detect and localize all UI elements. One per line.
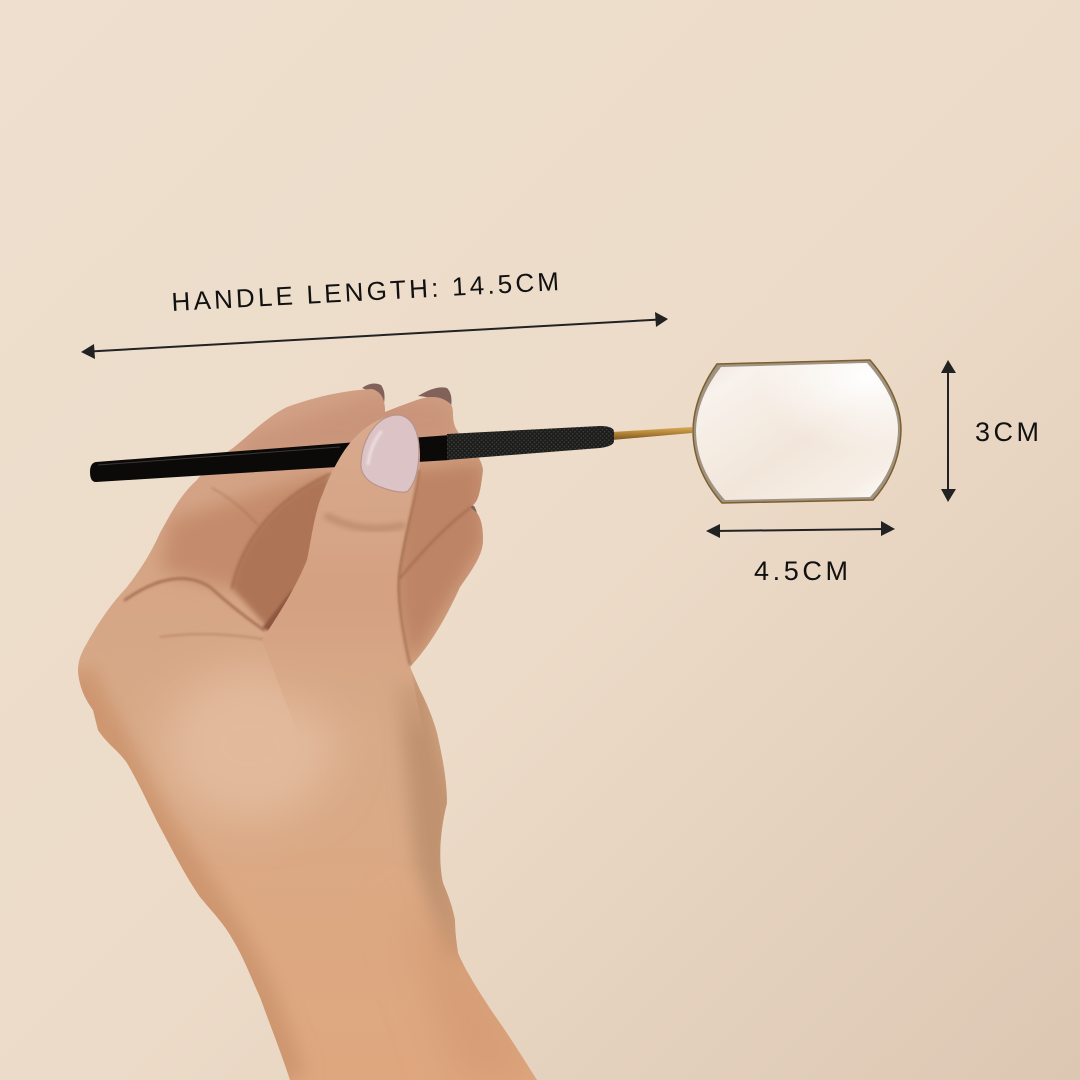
gap between thumb and palm <box>262 590 292 632</box>
mirror glass <box>696 363 898 500</box>
label: mirror height: 3CM <box>975 417 1039 447</box>
arrow: mirror width <box>706 521 895 538</box>
fingernails: index, middle, ring <box>362 384 477 520</box>
hand: fingers and palm behind the handle <box>78 384 540 1080</box>
left edge tone <box>78 672 290 1080</box>
arrow: mirror height <box>941 360 956 502</box>
back of wrist tone <box>434 959 525 1064</box>
thumb nail <box>361 415 419 492</box>
handle: black rod and knurled grip <box>90 426 614 482</box>
label: mirror width: 4.5CM <box>754 556 848 586</box>
right side hand shadow <box>398 676 460 956</box>
thumb right shadow line <box>399 470 419 665</box>
curled finger dark region <box>232 474 330 628</box>
mirror frame <box>693 360 901 503</box>
skin shading clipped to hand <box>78 395 540 1080</box>
thumb over the handle <box>262 415 425 740</box>
mirror glint <box>696 363 898 500</box>
black rod <box>90 435 450 482</box>
arrow: handle length <box>81 312 668 359</box>
thumb knuckle texture <box>325 515 405 528</box>
nail highlight <box>368 432 381 464</box>
right fingers <box>395 460 485 670</box>
finger tone below rod <box>160 470 330 590</box>
knurled grip <box>447 426 614 460</box>
finger creases <box>125 474 470 640</box>
rod highlight <box>98 447 340 465</box>
finger tone upper <box>244 397 458 450</box>
palm highlight <box>165 670 335 820</box>
label: handle length: HANDLE LENGTH: 14.5CM <box>171 266 560 317</box>
mirror head <box>693 360 901 503</box>
hand silhouette <box>78 389 537 1080</box>
thumb shape <box>262 415 425 740</box>
mirror stem <box>612 427 692 440</box>
